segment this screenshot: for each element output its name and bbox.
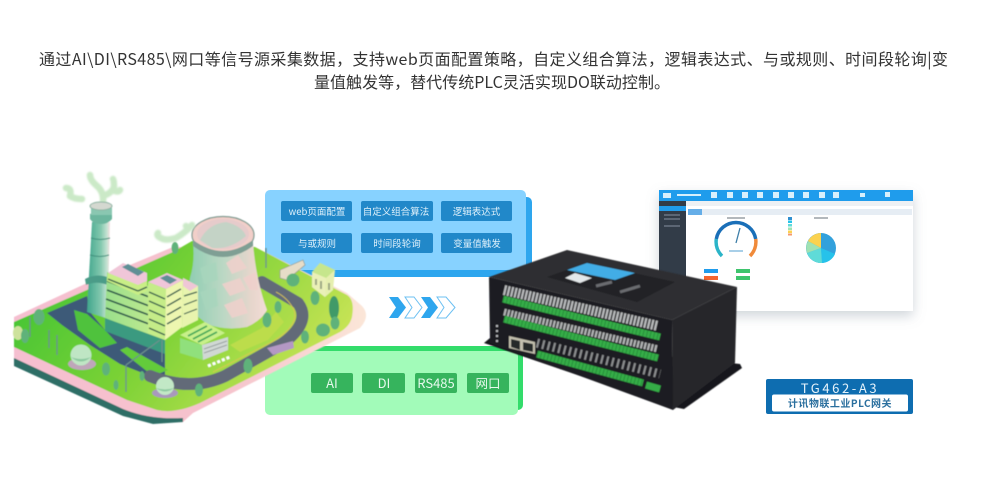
road: ring around tower <box>150 282 302 384</box>
button: 逻辑表达式 <box>441 201 512 221</box>
device: TG462-A3 gateway <box>484 250 742 410</box>
top face <box>489 250 737 320</box>
chimney <box>85 202 112 318</box>
product badge: 计讯物联工业PLC网关 <box>788 395 892 410</box>
button: RS485: RS485 <box>417 373 455 392</box>
smoke <box>66 175 192 240</box>
utility poles <box>30 248 266 392</box>
right face <box>672 287 737 410</box>
button: 自定义组合算法: 自定义组合算法 <box>363 204 429 218</box>
road: navy ground near buildings <box>47 296 165 378</box>
top label plate <box>547 263 675 302</box>
illustration: isometric power plant <box>13 175 366 424</box>
front face <box>489 277 673 410</box>
dashboard header <box>659 190 913 201</box>
domes <box>68 344 178 398</box>
button: 时间段轮询: 时间段轮询 <box>373 236 421 250</box>
intro text: 通过AI\DI\RS485\网口等信号源采集数据，支持web页面配置策略，自定义组合算法，逻辑表达式、与或规则、时间段轮询|变 <box>39 46 948 70</box>
pie chart <box>806 233 836 263</box>
inner lawn patches <box>74 310 117 348</box>
truck <box>267 341 294 355</box>
button: 与或规则 <box>281 233 352 253</box>
cooling tower <box>188 216 267 328</box>
grass <box>14 241 353 411</box>
product badge <box>766 378 913 414</box>
button: DI: DI <box>378 373 390 392</box>
dashboard sidebar <box>659 201 686 291</box>
inner lawn <box>230 312 284 352</box>
mounting flange <box>484 338 742 409</box>
gauge chart <box>716 222 756 256</box>
pie legend <box>788 217 792 236</box>
button: AI <box>311 373 353 393</box>
button: 与或规则: 与或规则 <box>298 236 336 250</box>
product badge: TG462-A3 <box>801 378 879 397</box>
terminal row 2 <box>504 312 658 358</box>
status indicators <box>704 269 750 280</box>
main buildings <box>105 263 230 366</box>
button: 网口 <box>467 373 509 393</box>
button: web页面配置: web页面配置 <box>289 204 345 218</box>
button: 逻辑表达式: 逻辑表达式 <box>453 204 501 218</box>
button: 变量值触发: 变量值触发 <box>453 236 501 250</box>
panel: web dashboard screenshot <box>659 190 913 311</box>
outbuilding <box>280 260 305 280</box>
small building <box>312 263 335 297</box>
terminal row 3 <box>537 343 660 389</box>
terminal row 1 <box>503 290 660 337</box>
intro text <box>39 46 948 93</box>
button: 自定义组合算法 <box>361 201 433 221</box>
ethernet ports <box>509 336 535 354</box>
dashboard tab bar <box>686 201 913 215</box>
intro text: 量值触发等，替代传统PLC灵活实现DO联动控制。 <box>314 69 670 93</box>
button: web页面配置 <box>281 201 352 221</box>
button: 网口: 网口 <box>475 373 501 392</box>
status LEDs <box>496 325 498 345</box>
panel: web configuration strategies <box>265 190 532 277</box>
button: DI <box>362 373 405 393</box>
chart titles <box>727 217 828 219</box>
button: 变量值触发 <box>441 233 512 253</box>
button: AI: AI <box>326 373 338 392</box>
arrow: flow chevrons <box>389 297 455 318</box>
island base <box>14 247 366 423</box>
button: 时间段轮询 <box>361 233 433 253</box>
trees <box>13 242 340 396</box>
panel: signal inputs <box>265 346 523 415</box>
